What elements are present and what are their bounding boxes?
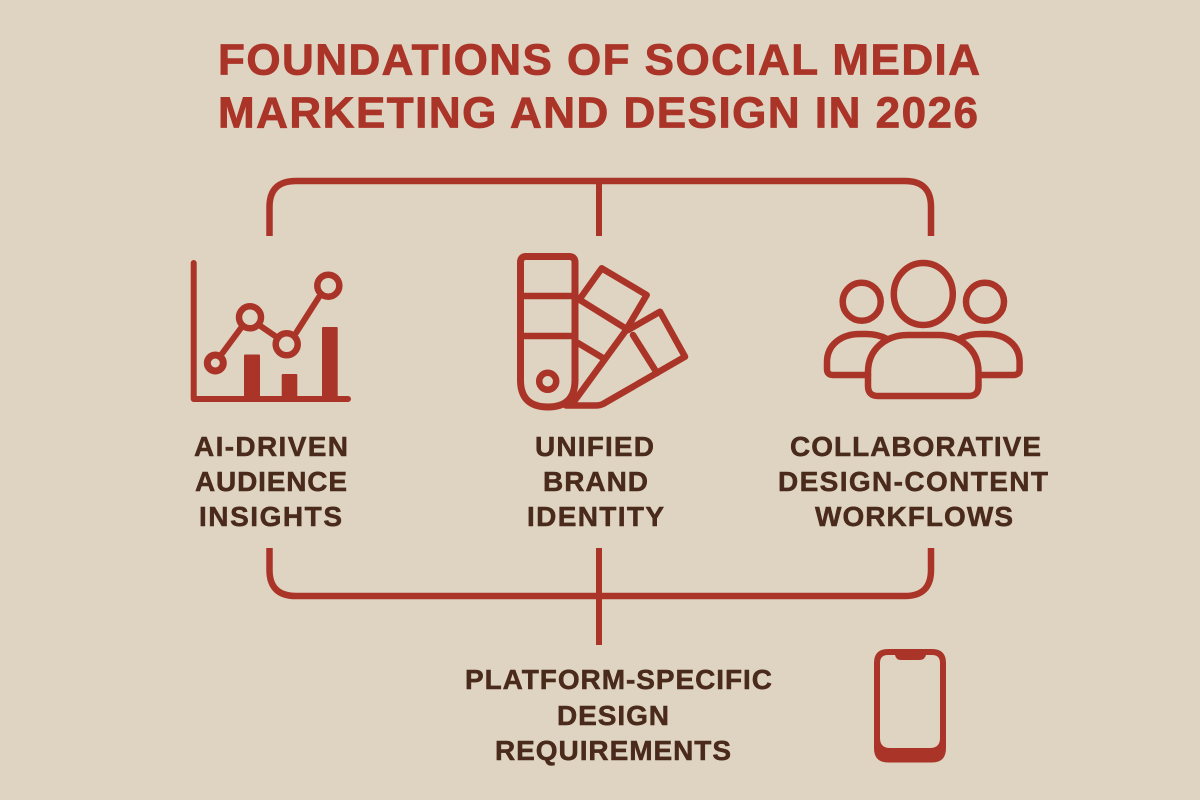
- bottom bracket connector: [270, 548, 931, 645]
- label: AI-driven audience insights: AI-DRIVEN: [194, 431, 348, 462]
- label: platform-specific design requirements: [465, 664, 772, 766]
- label: collaborative design-content workflows: WORKFLOWS: [815, 501, 1013, 532]
- label: collaborative design-content workflows: DESIGN-CONTENT: [778, 466, 1048, 497]
- icon: colour swatch fan: [520, 256, 685, 407]
- label: collaborative design-content workflows: COLLABORATIVE: [790, 431, 1041, 462]
- label: AI-driven audience insights: AUDIENCE: [195, 466, 347, 497]
- label: unified brand identity: [527, 431, 664, 532]
- panel: AI-driven audience insights: [194, 263, 348, 532]
- panel: platform-specific design requirements: [465, 649, 946, 766]
- panel: collaborative design-content workflows: [778, 263, 1048, 532]
- top bracket connector: [270, 181, 931, 236]
- label: unified brand identity: BRAND: [543, 466, 648, 497]
- label: platform-specific design requirements: DESIGN: [557, 700, 669, 731]
- label: AI-driven audience insights: INSIGHTS: [199, 501, 342, 532]
- label: platform-specific design requirements: PLATFORM-SPECIFIC: [465, 664, 772, 695]
- icon: group of people: [827, 263, 1020, 396]
- panel: unified brand identity: [520, 256, 685, 532]
- title: [218, 36, 980, 138]
- label: AI-driven audience insights: [194, 431, 348, 532]
- label: unified brand identity: IDENTITY: [527, 501, 664, 532]
- label: unified brand identity: UNIFIED: [535, 431, 654, 462]
- label: platform-specific design requirements: REQUIREMENTS: [495, 735, 731, 766]
- title: MARKETING AND DESIGN IN 2026: [218, 88, 978, 138]
- icon: smartphone: [874, 649, 946, 762]
- label: collaborative design-content workflows: [778, 431, 1048, 532]
- icon: line and bar chart: [194, 263, 348, 399]
- title: FOUNDATIONS OF SOCIAL MEDIA: [218, 36, 980, 84]
